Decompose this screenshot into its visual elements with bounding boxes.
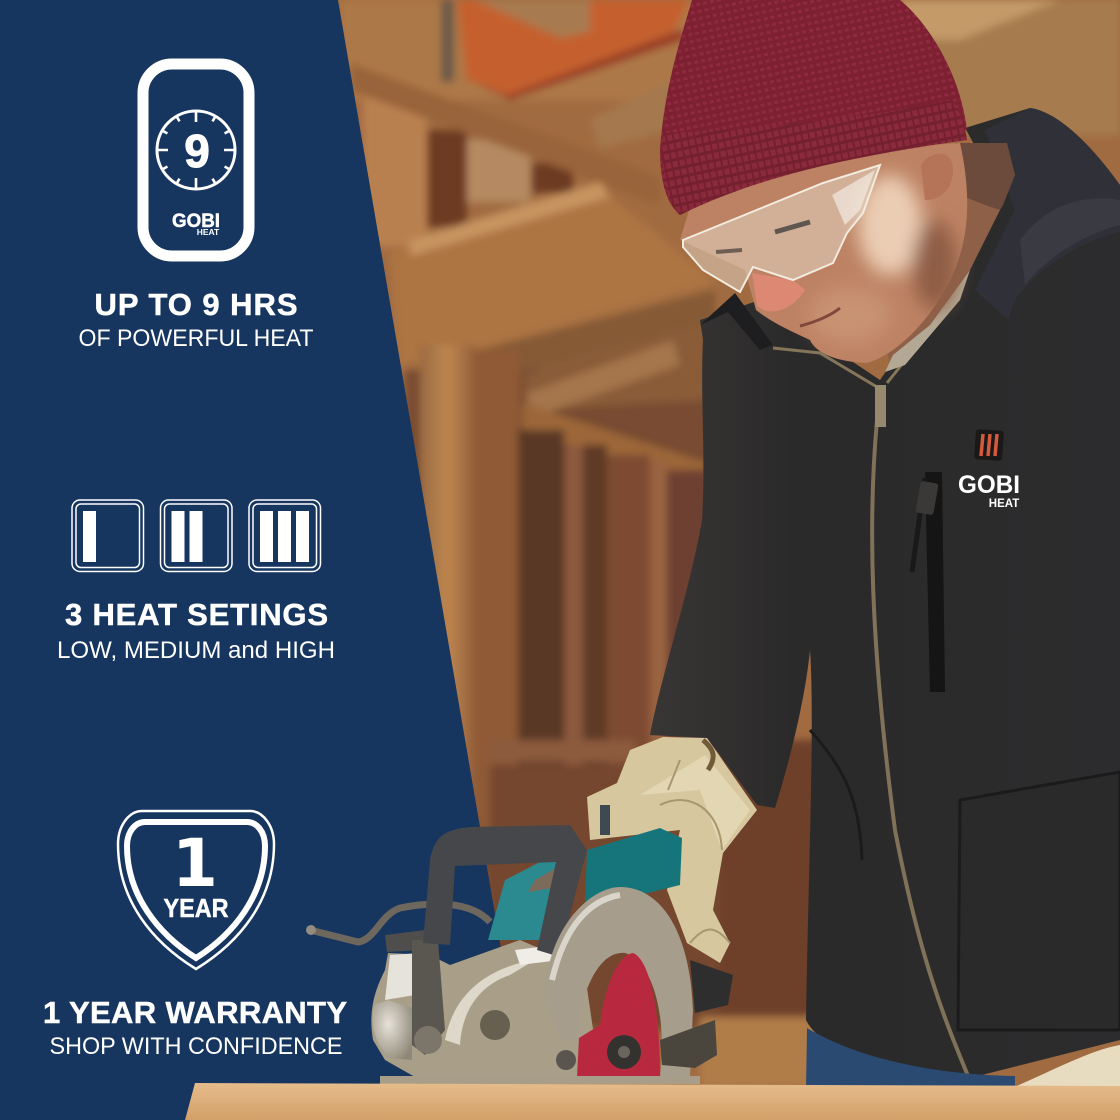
jacket logo: GOBI [958, 471, 1020, 499]
heading: UP TO 9 HRS [94, 287, 298, 322]
jacket: chest pocket [925, 472, 945, 692]
worker: gloved hand [587, 737, 757, 963]
icon: warranty shield [118, 811, 274, 969]
icon: warranty shield: 1 [172, 825, 218, 902]
mouth [800, 308, 840, 326]
worker: safety glasses [683, 165, 880, 292]
subheading: OF POWERFUL HEAT [78, 325, 314, 352]
jacket: hood [975, 108, 1120, 320]
subheading: LOW, MEDIUM and HIGH [57, 637, 335, 664]
heading: 3 HEAT SETINGS [65, 597, 328, 632]
icon: setting two [160, 500, 232, 572]
jacket: collar flap [700, 293, 773, 350]
saw: blade guard [545, 887, 693, 1077]
saw: red blade [577, 953, 660, 1077]
heading: 1 YEAR WARRANTY [43, 995, 347, 1030]
saw: motor housing [371, 940, 600, 1077]
saw: handle [423, 825, 587, 957]
feature: warranty [43, 811, 347, 1060]
jeans [806, 1028, 1015, 1090]
icon: phone with clock: GOBI [172, 210, 220, 232]
saw: right housing [690, 960, 733, 1013]
jacket heat controller [974, 429, 1004, 461]
saw: bevel rod [310, 904, 490, 942]
jacket: main zipper [872, 420, 968, 1076]
sawdust [1012, 1045, 1120, 1090]
icon: warranty shield: YEAR [164, 893, 229, 923]
navy panel [0, 0, 524, 1120]
jacket logo: HEAT [989, 498, 1019, 510]
nose [752, 273, 805, 311]
wooden board [185, 1083, 1120, 1120]
saw: teal body [488, 862, 560, 940]
worker: knit hat [660, 0, 967, 215]
photo background: wooden framing [330, 0, 1120, 1120]
jacket: front pocket [958, 772, 1120, 1030]
icon: phone with clock: 9 [184, 125, 210, 177]
icon: phone with clock [143, 64, 249, 256]
feature: up to 9 hours [78, 64, 314, 352]
worker: inner hood and neck [880, 143, 1015, 372]
worker: face [680, 143, 967, 363]
icon: phone with clock: HEAT [197, 227, 220, 237]
ear [921, 154, 953, 200]
icon: setting three [249, 500, 320, 572]
worker: jacket [650, 108, 1120, 1078]
feature: heat settings [57, 500, 335, 664]
circular saw [306, 825, 733, 1084]
subheading: SHOP WITH CONFIDENCE [50, 1033, 342, 1060]
icon: setting one [72, 500, 144, 572]
